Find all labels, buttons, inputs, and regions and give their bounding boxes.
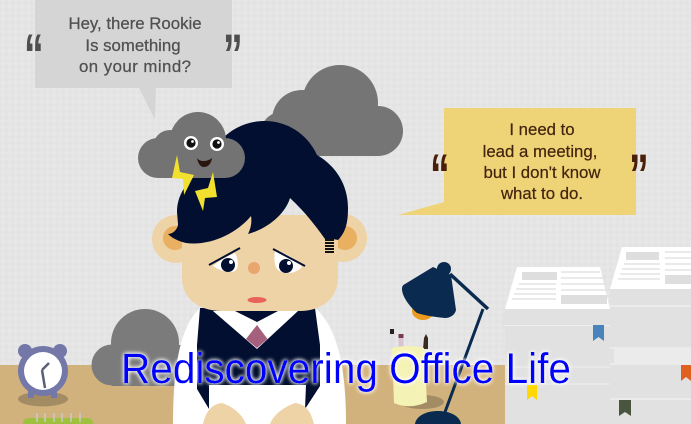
title: Rediscovering Office Life bbox=[121, 345, 571, 393]
closing quote: ” bbox=[223, 22, 243, 88]
character bbox=[152, 121, 367, 424]
left eyebrow bbox=[209, 248, 240, 265]
speech bubble: rookie bbox=[398, 108, 649, 215]
bubble text: I need to bbox=[509, 120, 575, 139]
hair clip bbox=[325, 239, 334, 253]
hair bbox=[168, 121, 348, 243]
orange bookmark bbox=[681, 365, 691, 381]
right paper stack bbox=[610, 247, 691, 424]
bubble text: but I don't know bbox=[483, 163, 601, 182]
lower left cloud bbox=[92, 309, 202, 386]
face bbox=[182, 215, 338, 311]
bubble text: Is something bbox=[85, 36, 181, 55]
left inner ear bbox=[163, 226, 187, 250]
desk lamp bbox=[402, 262, 488, 424]
pen cup bbox=[390, 329, 444, 409]
bubble text: on your mind? bbox=[79, 57, 191, 76]
opening quote: “ bbox=[430, 142, 450, 208]
green notebook bbox=[23, 413, 93, 424]
alarm clock bbox=[18, 344, 68, 406]
speech bubble: colleague bbox=[24, 0, 243, 120]
closing quote: ” bbox=[629, 142, 649, 208]
bubble text: lead a meeting, bbox=[483, 142, 597, 161]
hands bbox=[203, 403, 314, 424]
opening quote: “ bbox=[24, 22, 44, 88]
mouth bbox=[248, 297, 266, 303]
cloud eyes bbox=[184, 136, 224, 151]
vest bbox=[197, 308, 320, 409]
blue bookmark bbox=[593, 325, 604, 341]
collar bbox=[213, 311, 298, 349]
shirt bbox=[173, 308, 346, 424]
bubble text: what to do. bbox=[500, 184, 583, 203]
right eyebrow bbox=[273, 249, 305, 266]
right eye bbox=[274, 250, 302, 273]
right ear bbox=[319, 214, 367, 262]
bubble text: Hey, there Rookie bbox=[68, 14, 202, 33]
tie bbox=[246, 325, 268, 348]
right inner ear bbox=[333, 226, 357, 250]
left eye bbox=[213, 253, 238, 272]
left paper stack bbox=[502, 267, 610, 424]
cloud smile bbox=[197, 158, 212, 167]
large cloud behind head bbox=[260, 65, 403, 156]
olive bookmark bbox=[619, 400, 631, 416]
nose bbox=[248, 262, 260, 274]
lightning bolts bbox=[172, 155, 217, 211]
small smiling thundercloud bbox=[138, 112, 245, 211]
yellow bookmark bbox=[527, 385, 537, 400]
desk bbox=[0, 365, 691, 424]
left ear bbox=[152, 215, 200, 263]
